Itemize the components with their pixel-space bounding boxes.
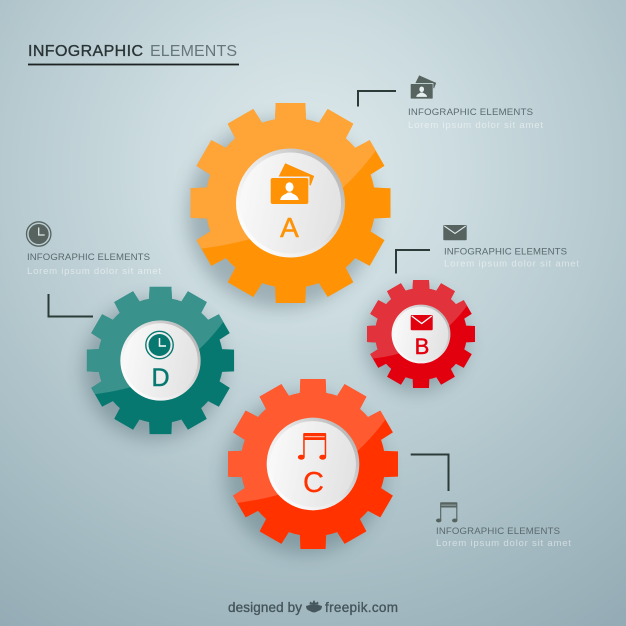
- title: [28, 43, 239, 65]
- small icon: envelope: [443, 225, 467, 240]
- gear B: red mail: [362, 275, 480, 393]
- label B: INFOGRAPHIC ELEMENTS: [444, 246, 567, 258]
- small icon: clock: [26, 222, 51, 246]
- icon: ID card in gear A: [271, 163, 314, 204]
- letter A: A: [280, 212, 299, 243]
- small icon: music notes: [436, 502, 457, 522]
- small icon: ID card: [411, 75, 436, 99]
- footer credit: designed by: [228, 600, 302, 615]
- gear A: orange card: [180, 93, 400, 313]
- label D: INFOGRAPHIC ELEMENTS: [27, 252, 150, 263]
- letter B: B: [415, 334, 429, 359]
- footer credit: freepik.com: [325, 600, 398, 615]
- label A: INFOGRAPHIC ELEMENTS: [408, 107, 533, 118]
- title: ELEMENTS: [150, 43, 237, 60]
- gear D: teal clock: [79, 279, 242, 442]
- leader line A: [358, 91, 396, 106]
- leader line C: [411, 454, 448, 491]
- gear C: red-orange music: [220, 370, 406, 558]
- letter C: C: [303, 467, 324, 499]
- icon: music notes in gear C: [298, 433, 326, 460]
- icon: freepik logo: [306, 600, 322, 612]
- letter D: D: [151, 364, 170, 392]
- footer credit: [228, 600, 398, 615]
- leader line D: [48, 294, 93, 316]
- leader line B: [396, 250, 430, 274]
- title: INFOGRAPHIC: [28, 43, 143, 60]
- label C: [436, 526, 571, 549]
- label B: [444, 246, 579, 270]
- label A: Lorem ipsum dolor sit amet: [408, 120, 543, 131]
- label A: [408, 107, 543, 131]
- label D: [27, 252, 161, 277]
- label C: INFOGRAPHIC ELEMENTS: [436, 526, 560, 537]
- icon: envelope in gear B: [411, 315, 433, 330]
- label D: Lorem ipsum dolor sit amet: [27, 266, 161, 277]
- icon: clock in gear D: [146, 331, 173, 359]
- label C: Lorem ipsum dolor sit amet: [436, 538, 571, 549]
- label B: Lorem ipsum dolor sit amet: [444, 258, 579, 270]
